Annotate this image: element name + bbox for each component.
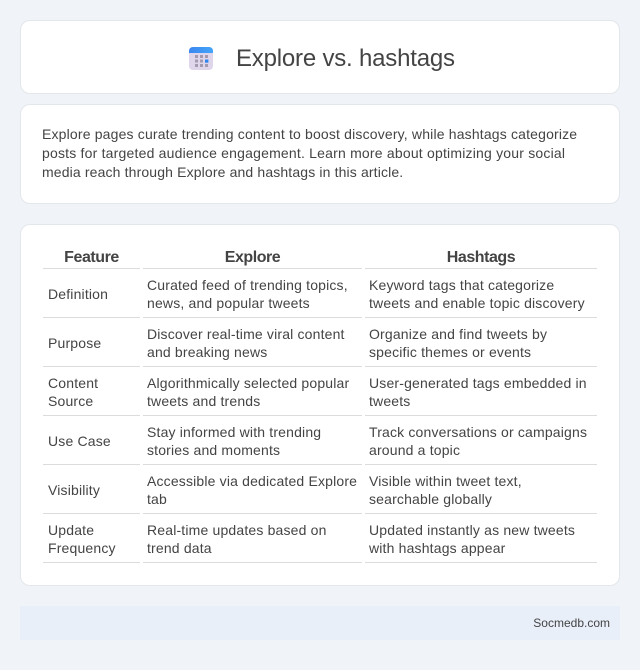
row: Purpose: specific themes or events [369, 344, 531, 360]
row: Content Source: Content [48, 375, 98, 391]
row: Visibility: tab [147, 491, 167, 507]
intro text: Explore pages curate trending content to boost discovery, while hashtags categorize [42, 126, 577, 142]
row: Visibility: Accessible via dedicated Explore [147, 473, 357, 489]
row: Definition: Definition [48, 286, 108, 302]
row: Content Source: Algorithmically selected popular [147, 375, 349, 391]
row: Update Frequency: with hashtags appear [369, 540, 506, 556]
icon: calendar [189, 47, 213, 70]
intro text: media reach through Explore and hashtags in this article. [42, 164, 403, 180]
row: Use Case: Track conversations or campaigns [369, 424, 587, 440]
row: Use Case: Stay informed with trending [147, 424, 321, 440]
table header: Hashtags [447, 249, 515, 266]
row: Visibility [48, 473, 522, 507]
row: Use Case: around a topic [369, 442, 460, 458]
row: Definition: Curated feed of trending topics, [147, 277, 348, 293]
row: Content Source: tweets and trends [147, 393, 260, 409]
row: Purpose: and breaking news [147, 344, 267, 360]
row: Content Source: tweets [369, 393, 410, 409]
row: Visibility: Visible within tweet text, [369, 473, 522, 489]
title: Explore vs. hashtags [236, 45, 455, 72]
row: Definition [48, 277, 585, 311]
row: Content Source: Source [48, 393, 93, 409]
row: Update Frequency: Updated instantly as new tweets [369, 522, 575, 538]
row: Purpose: Discover real-time viral content [147, 326, 345, 342]
row: Definition: tweets and enable topic discovery [369, 295, 585, 311]
footer bar [20, 606, 620, 640]
row: Definition: news, and popular tweets [147, 295, 310, 311]
row: Content Source [48, 375, 587, 409]
row: Use Case: stories and moments [147, 442, 280, 458]
row: Use Case [48, 424, 587, 458]
row: Use Case: Use Case [48, 433, 111, 449]
row: Update Frequency: Update [48, 522, 94, 538]
row: Purpose: Organize and find tweets by [369, 326, 547, 342]
row: Purpose: Purpose [48, 335, 101, 351]
row: Update Frequency: Real-time updates based on [147, 522, 327, 538]
row: Update Frequency: Frequency [48, 540, 116, 556]
panel: introduction [20, 104, 620, 204]
row: Visibility: Visibility [48, 482, 100, 498]
table header: Feature [64, 249, 119, 266]
table header: Explore [225, 249, 280, 266]
panel: comparison table [20, 224, 620, 586]
row: Definition: Keyword tags that categorize [369, 277, 554, 293]
row: Purpose [48, 326, 547, 360]
intro text [42, 126, 577, 180]
row: Visibility: searchable globally [369, 491, 492, 507]
row: Content Source: User-generated tags embedded in [369, 375, 587, 391]
row: Update Frequency: trend data [147, 540, 212, 556]
footer text: Socmedb.com [533, 616, 610, 630]
table header [64, 249, 515, 266]
row: Update Frequency [48, 522, 575, 556]
panel: title card [20, 20, 620, 94]
intro text: posts for targeted audience engagement. Learn more about optimizing your social [42, 145, 565, 161]
